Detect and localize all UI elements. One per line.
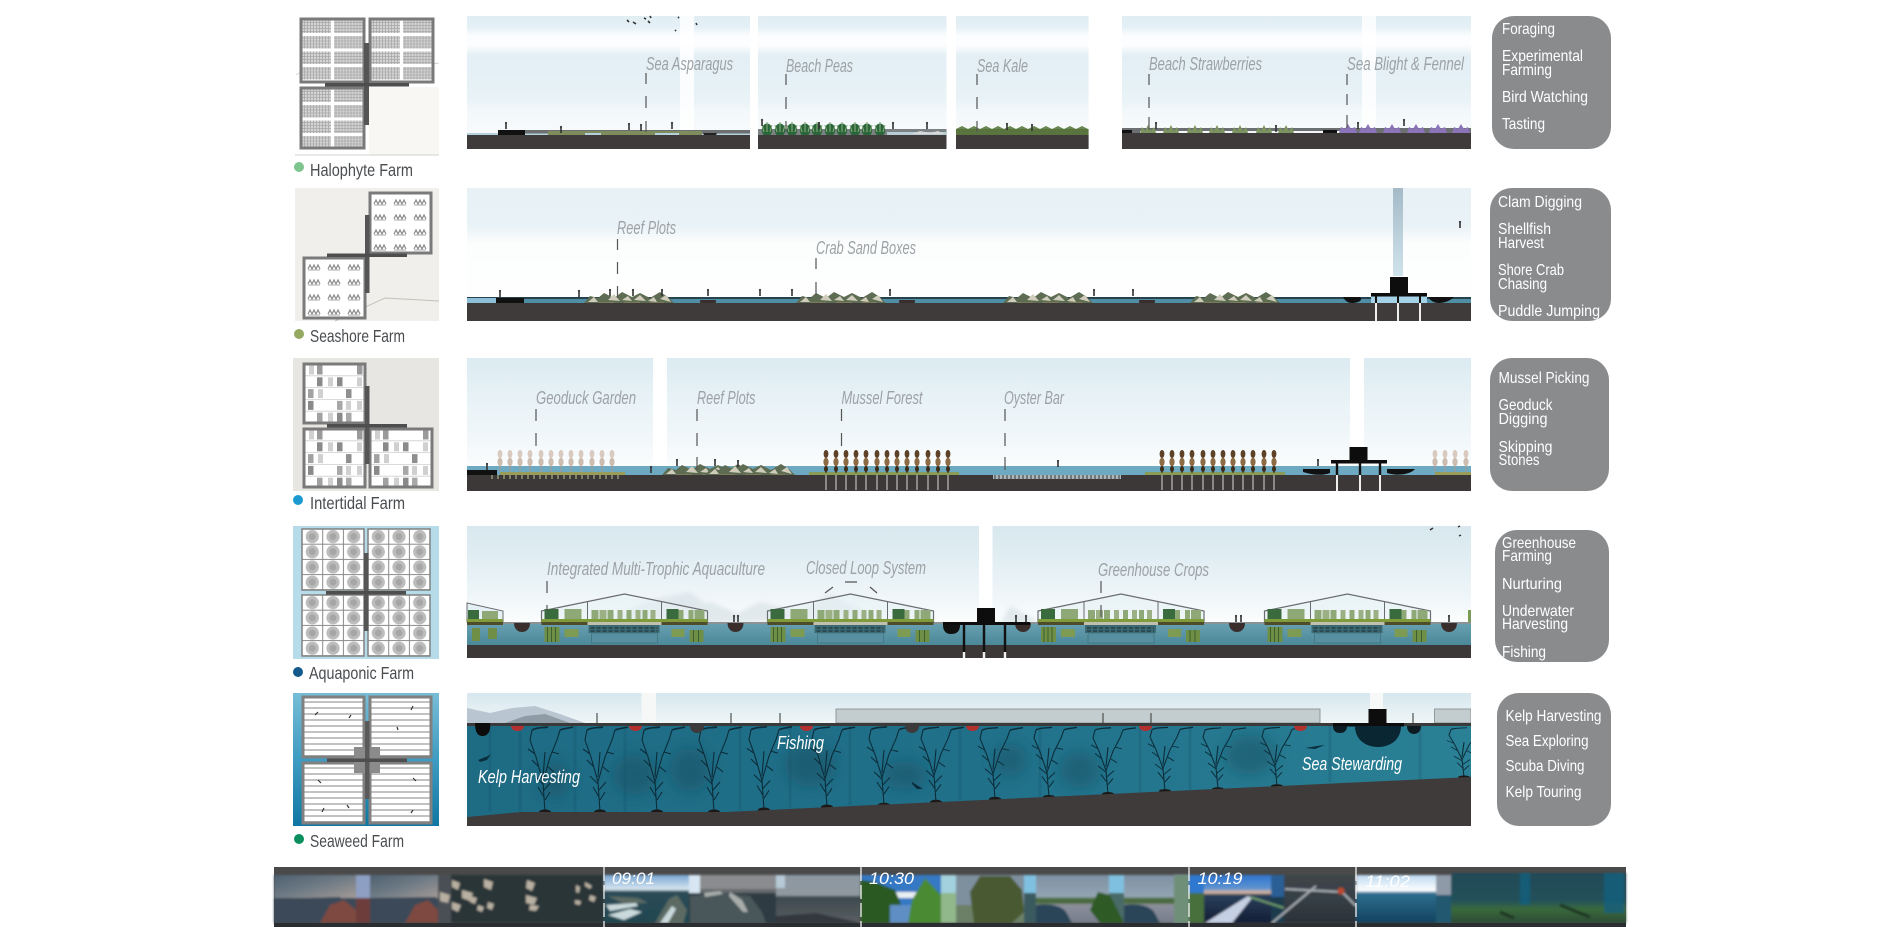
activities: seashore: Shore Crab: [1498, 262, 1564, 279]
callout: crab sand boxes: [816, 238, 916, 295]
activities: aquaponic: Farming: [1502, 548, 1552, 565]
icon: diver: [478, 745, 1325, 789]
callout: closed loop system: [806, 558, 926, 593]
activities: aquaponic: Fishing: [1502, 644, 1546, 661]
activities: seashore: Shellfish: [1498, 221, 1551, 238]
section: seashore scene: [467, 188, 1471, 321]
callout: crab sand boxes: Crab Sand Boxes: [816, 238, 916, 258]
clip: open causeway: [1174, 875, 1356, 923]
callout: closed loop system: Closed Loop System: [806, 558, 926, 578]
label: Seashore Farm: Seashore Farm: [310, 326, 405, 346]
callout: sea kale: [977, 56, 1028, 132]
callout: sea blight and fennel: [1347, 54, 1465, 128]
activities: intertidal: Digging: [1498, 411, 1548, 428]
icon: greenhouses: [467, 594, 1471, 643]
callout: beach strawberries: [1149, 54, 1262, 130]
clip: dusk shoreline and rocks: [274, 875, 604, 923]
icon: kelp plants: [528, 727, 1492, 814]
activities: seaweed: Scuba Diving: [1506, 758, 1584, 775]
row: seaweed farm: [293, 693, 1611, 851]
callout: greenhouse crops: [1098, 560, 1209, 617]
callout: sea asparagus: [646, 54, 733, 132]
label: Aquaponic Farm: Aquaponic Farm: [309, 663, 414, 683]
activities: intertidal: Skipping: [1498, 439, 1552, 456]
callout: geoduck garden: Geoduck Garden: [536, 388, 636, 408]
activities: aquaponic: Greenhouse: [1502, 535, 1576, 552]
callout: fishing: Fishing: [777, 733, 824, 753]
clip: rocky coast: [604, 875, 861, 924]
callout: mussel forest: [842, 388, 923, 446]
plan: aquaponic farm: [293, 526, 439, 659]
film strip timeline: [274, 867, 1626, 927]
row: aquaponic farm: [293, 526, 1609, 683]
dot: halophyte: [294, 162, 304, 172]
plan: halophyte farm: [295, 19, 439, 155]
timestamp: 10:19: 10:19: [1198, 869, 1243, 888]
label: Seaweed Farm: Seaweed Farm: [310, 831, 404, 851]
clip: forest and road: [861, 875, 1189, 923]
activities: seaweed: [1497, 693, 1611, 826]
callout: geoduck garden: [536, 388, 636, 446]
activities: seashore: Harvest: [1498, 235, 1544, 252]
activities: seashore: Puddle Jumping: [1498, 303, 1600, 320]
activities: halophyte: Tasting: [1502, 116, 1545, 133]
callout: sea asparagus: Sea Asparagus: [646, 54, 733, 74]
activities: seashore: Chasing: [1498, 276, 1547, 293]
activities: halophyte: Foraging: [1502, 21, 1555, 38]
timestamp: 11:02: 11:02: [1365, 872, 1411, 891]
activities: intertidal: [1490, 358, 1609, 491]
activities: aquaponic: Harvesting: [1502, 616, 1568, 633]
row: intertidal farm: [293, 358, 1609, 513]
callout: oyster bar: Oyster Bar: [1004, 388, 1065, 408]
activities: seashore: Clam Digging: [1498, 194, 1582, 211]
section: beach peas panel: [758, 16, 947, 149]
callout: kelp harvesting: Kelp Harvesting: [478, 767, 580, 787]
activities: aquaponic: Underwater: [1502, 603, 1575, 620]
plan: intertidal farm: [293, 358, 439, 491]
callout: sea stewarding: Sea Stewarding: [1302, 754, 1402, 774]
activities: seashore: [1490, 188, 1611, 321]
callout: greenhouse crops: Greenhouse Crops: [1098, 560, 1209, 580]
activities: seaweed: Sea Exploring: [1506, 733, 1588, 750]
row: halophyte farm: [294, 16, 1611, 180]
callout: beach peas: [786, 56, 853, 132]
timestamp: 10:30: 10:30: [869, 869, 915, 888]
activities: halophyte: Farming: [1502, 62, 1552, 79]
section: sea asparagus panel: [467, 16, 750, 149]
dot: seaweed: [294, 834, 304, 844]
icon: aquaponic pavilion: [943, 608, 1030, 658]
callout: integrated multi-trophic aquaculture: Integrated Multi-Trophic Aquaculture: [547, 559, 765, 579]
activities: seaweed: Kelp Harvesting: [1506, 708, 1602, 725]
section: intertidal scene: [467, 358, 1471, 491]
section: beach strawberries and sea blight panel: [1122, 16, 1471, 149]
activities: halophyte: [1492, 16, 1611, 149]
callout: mussel forest: Mussel Forest: [842, 388, 923, 408]
activities: aquaponic: [1495, 530, 1609, 662]
activities: seaweed: Kelp Touring: [1506, 784, 1582, 801]
callout: reef plots: Reef Plots: [697, 388, 756, 408]
dot: aquaponic: [293, 667, 303, 677]
callout: sea kale: Sea Kale: [977, 56, 1028, 76]
section: seaweed scene: [467, 693, 1492, 826]
label: Intertidal Farm: Intertidal Farm: [310, 493, 405, 513]
clip: underwater forest: [1356, 873, 1626, 923]
dot: seashore: [294, 329, 304, 339]
activities: halophyte: Bird Watching: [1502, 89, 1588, 106]
activities: intertidal: Stones: [1498, 452, 1540, 469]
label: Halophyte Farm: Halophyte Farm: [310, 160, 413, 180]
section: aquaponic scene: [467, 526, 1471, 658]
activities: halophyte: Experimental: [1502, 48, 1583, 65]
callout: reef plots: [697, 388, 756, 470]
icon: seaweed pavilion: [1333, 709, 1421, 747]
plan: seashore farm: [295, 188, 439, 321]
plan: seaweed farm: [293, 693, 439, 826]
activities: aquaponic: Nurturing: [1502, 576, 1562, 593]
icon: observation tower: [1343, 188, 1454, 303]
row: seashore farm: [294, 188, 1611, 346]
icon: intertidal pavilion: [1303, 447, 1415, 491]
callout: reef plots: Reef Plots: [617, 218, 676, 238]
callout: beach peas: Beach Peas: [786, 56, 853, 76]
callout: oyster bar: [1004, 388, 1065, 470]
timestamp: 09:01: 09:01: [612, 869, 655, 888]
callout: sea blight and fennel: Sea Blight & Fennel: [1347, 54, 1465, 74]
activities: intertidal: Mussel Picking: [1498, 370, 1590, 387]
dot: intertidal: [293, 495, 303, 505]
activities: intertidal: Geoduck: [1498, 397, 1553, 414]
callout: beach strawberries: Beach Strawberries: [1149, 54, 1262, 74]
section: sea kale panel: [956, 16, 1089, 149]
callout: reef plots: [617, 218, 676, 298]
